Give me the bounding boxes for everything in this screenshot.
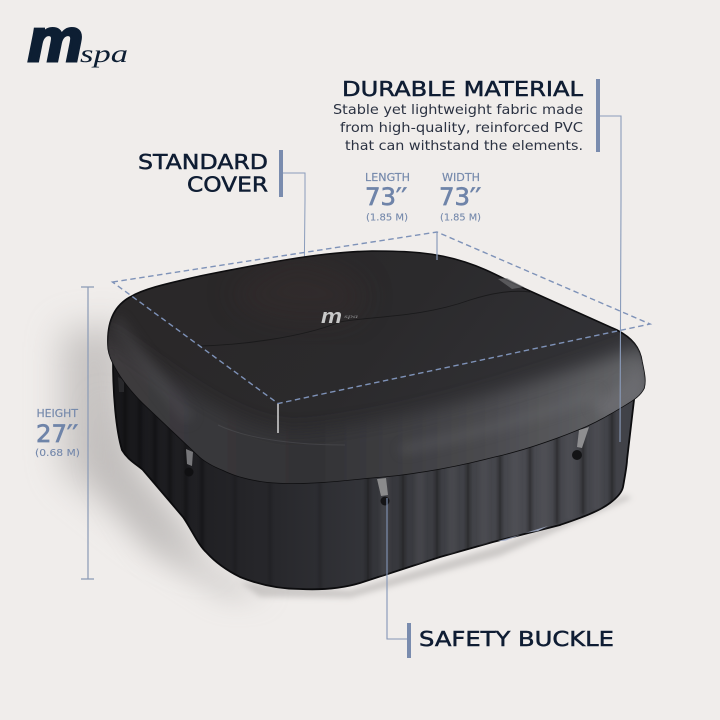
heading: standard cover: STANDARD [138, 150, 268, 174]
dimension: width [439, 172, 481, 224]
logo: mspa: spa [80, 41, 128, 68]
text block: durable material: Stable yet lightweight fabric made [333, 102, 583, 118]
corner tick: front [277, 404, 279, 433]
safety buckles [118, 377, 589, 506]
dimension: height [35, 408, 80, 459]
dimension: width: WIDTH [442, 172, 480, 184]
text block: durable material: that can withstand the elements. [345, 138, 583, 154]
text block: durable material: from high-quality, reinforced PVC [340, 120, 583, 136]
cover logo [321, 306, 359, 328]
dimension: width: (1.85 M) [440, 212, 481, 224]
dashed dimension outline [112, 232, 650, 404]
cover logo: m [321, 306, 342, 328]
text block: durable material [333, 77, 584, 154]
dimension: length: (1.85 M) [366, 212, 408, 224]
logo: mspa: m [28, 7, 83, 74]
cover label patch [498, 278, 524, 289]
dimension: length: LENGTH [365, 172, 410, 184]
dimension: height: (0.68 M) [35, 448, 80, 459]
height dimension line [81, 287, 94, 579]
heading: safety buckle: SAFETY BUCKLE [419, 627, 614, 651]
connector: durable material [600, 116, 621, 442]
callout bar and connector: standard cover [279, 150, 305, 296]
dimension: length [365, 172, 410, 224]
cover logo: spa [344, 315, 359, 320]
cover rim shading [108, 330, 645, 484]
logo: mspa [28, 7, 128, 74]
text block: durable material: DURABLE MATERIAL [342, 77, 584, 101]
pale underside glimpses [498, 526, 548, 541]
wall ribs [170, 412, 615, 580]
callout bar: safety buckle [407, 623, 411, 658]
heading: standard cover [138, 150, 268, 196]
cover [100, 251, 660, 500]
tub shadow [62, 325, 632, 598]
dimension: length: 73′′ [365, 183, 407, 211]
connector: safety buckle [387, 498, 407, 639]
dimension: height: HEIGHT [36, 408, 79, 420]
corner tick: top [436, 232, 438, 260]
dimension: height: 27′′ [36, 420, 78, 448]
cover seam [200, 291, 530, 346]
callout bar: durable material [596, 79, 600, 152]
hot tub body [113, 360, 634, 590]
dimension: width: 73′′ [439, 183, 481, 211]
heading: standard cover: COVER [187, 172, 268, 196]
